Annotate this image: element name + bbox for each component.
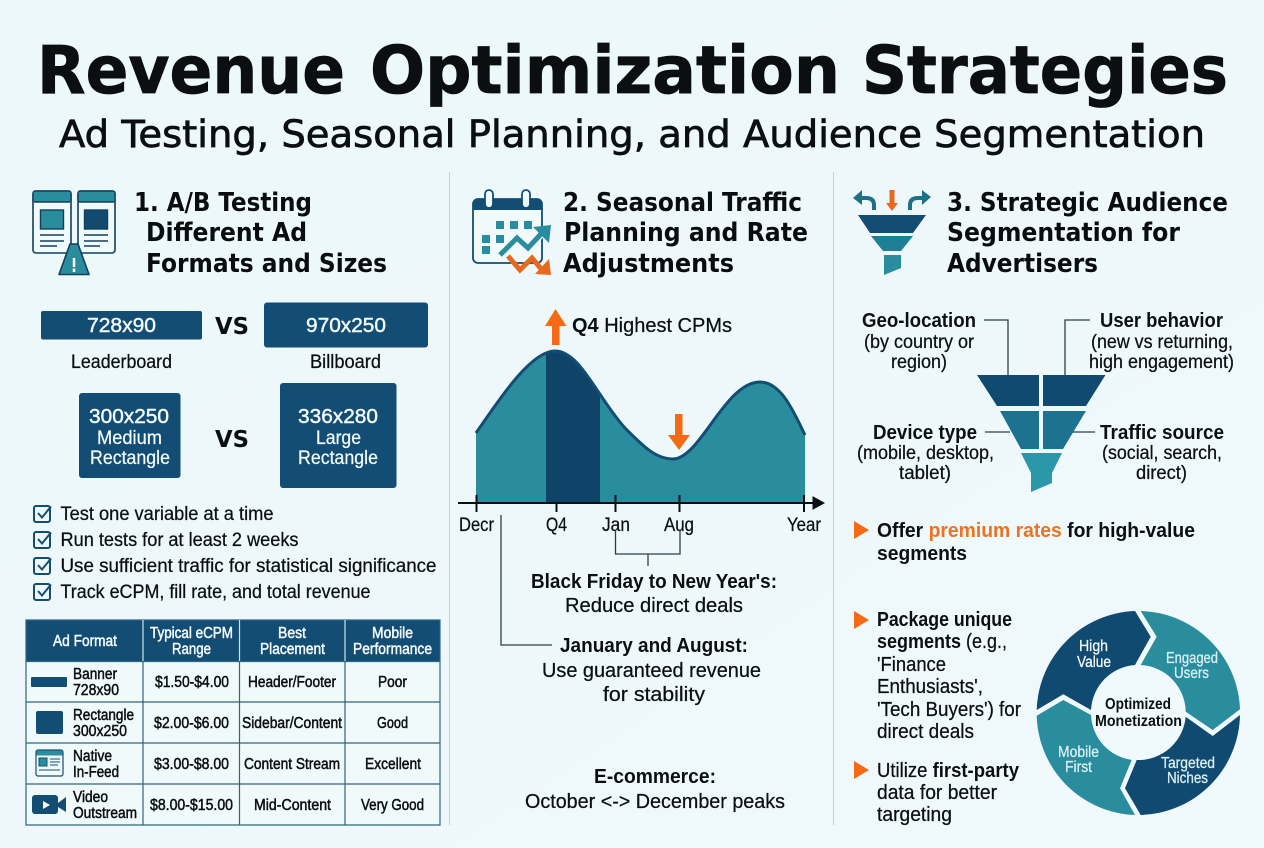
table: ad format comparison: Native <box>73 748 112 765</box>
label: device type: (mobile, desktop, <box>857 443 994 464</box>
icon: banner <box>31 677 67 687</box>
callout: January and August <box>542 635 761 706</box>
bullet: package unique segments: 'Finance <box>877 654 946 676</box>
label: user behavior: User behavior <box>1100 310 1223 332</box>
icon: native feed <box>36 750 63 776</box>
segment: engaged users <box>1141 611 1240 730</box>
panel: seasonal planning <box>458 188 824 813</box>
callout: January and August: Use guaranteed revenue <box>542 660 761 682</box>
checklist: Track eCPM, fill rate, and total revenue <box>60 582 370 603</box>
label: traffic source: (social, search, <box>1102 443 1222 464</box>
ad size: 300x250 medium rectangle: Rectangle <box>90 448 170 469</box>
arrow: Q4 up <box>545 309 566 345</box>
callout: Black Friday: Black Friday to New Year's: <box>531 571 777 593</box>
callout: E-commerce <box>525 766 785 813</box>
vs label: VS <box>215 427 249 453</box>
center label <box>1095 696 1182 730</box>
table: ad format comparison: In-Feed <box>73 764 119 781</box>
heading: section 1: Different Ad <box>146 218 307 248</box>
label: user behavior <box>1089 310 1234 373</box>
segment: engaged users: Users <box>1174 665 1209 682</box>
icon: A/B test windows <box>33 191 115 274</box>
label: geo-location: (by country or <box>864 332 975 353</box>
label: geo-location: Geo-location <box>862 310 976 332</box>
callout: January and August: for stability <box>603 684 705 706</box>
heading: section 2 <box>563 188 808 279</box>
table: ad format comparison <box>26 620 440 825</box>
ad size: 336x280 large rectangle: Rectangle <box>298 448 378 469</box>
heading: section 1 <box>134 188 387 279</box>
table: ad format comparison: Banner <box>73 666 117 683</box>
heading: section 1: Formats and Sizes <box>146 249 387 279</box>
table: ad format comparison: $2.00-$6.00 <box>154 715 229 732</box>
table: ad format comparison: Outstream <box>73 805 137 822</box>
heading: section 2: Planning and Rate <box>564 218 808 248</box>
table: ad format comparison: Mid-Content <box>254 797 332 814</box>
icon: rectangle <box>36 711 63 734</box>
heading: section 3 <box>947 188 1228 279</box>
heading: section 3: Advertisers <box>947 249 1098 279</box>
table: ad format comparison: Rectangle <box>73 707 134 724</box>
ad size: 728x90 leaderboard <box>41 311 202 373</box>
ad size: 336x280 large rectangle: Large <box>316 428 361 449</box>
funnel diagram <box>977 320 1106 492</box>
label: traffic source: direct) <box>1136 463 1187 484</box>
table: ad format comparison: Video <box>73 789 108 806</box>
subtitle: Ad Testing, Seasonal Planning, and Audience Segmentation <box>59 113 1205 156</box>
segment: targeted niches: Targeted <box>1161 755 1215 772</box>
segment: targeted niches <box>1125 715 1240 815</box>
table: ad format comparison: $1.50-$4.00 <box>155 674 229 691</box>
table: ad format comparison: Sidebar/Content <box>242 715 343 732</box>
title: Strategies <box>862 32 1228 109</box>
heading: section 2: Adjustments <box>563 249 734 279</box>
table: ad format comparison: Typical eCPM <box>150 625 233 642</box>
ad size: 300x250 medium rectangle <box>79 393 180 478</box>
bullet: premium rates: Offer premium rates for high-value <box>877 520 1195 542</box>
bullet: package unique segments: direct deals <box>877 721 974 743</box>
table: ad format comparison: 300x250 <box>73 723 127 740</box>
bullet: package unique segments: segments (e.g., <box>877 631 1007 653</box>
heading: section 2: 2. Seasonal Traffic <box>563 188 802 218</box>
ad size: 728x90 leaderboard: 728x90 <box>87 315 156 337</box>
segment: mobile first <box>1037 700 1135 815</box>
bullet: premium rates: segments <box>877 543 967 565</box>
ad size: 728x90 leaderboard: Leaderboard <box>71 352 172 373</box>
checklist: Test one variable at a time <box>60 504 274 525</box>
chart: seasonal traffic curve: Year <box>787 515 822 536</box>
chart: seasonal traffic curve: Jan <box>602 515 630 536</box>
table: ad format comparison: Content Stream <box>244 756 340 773</box>
title <box>37 32 1228 109</box>
checklist: Use sufficient traffic for statistical significance <box>60 556 436 577</box>
segment: high value <box>1037 611 1151 710</box>
callout: Black Friday: Reduce direct deals <box>565 595 743 617</box>
ad size: 300x250 medium rectangle: Medium <box>97 428 162 449</box>
table: ad format comparison: Placement <box>260 641 326 658</box>
ad size: 336x280 large rectangle: 336x280 <box>298 406 378 428</box>
center label: Monetization <box>1095 713 1182 730</box>
bullet: first-party data: Utilize first-party <box>877 760 1020 782</box>
center label: Optimized <box>1105 696 1171 713</box>
icon: video <box>32 795 66 814</box>
heading: section 3: 3. Strategic Audience <box>947 188 1228 218</box>
callout: E-commerce: E-commerce: <box>594 766 716 788</box>
heading: section 1: 1. A/B Testing <box>134 188 312 218</box>
chart: optimized monetization cycle <box>1037 611 1240 815</box>
table: ad format comparison: Poor <box>378 674 407 691</box>
segment: targeted niches: Niches <box>1167 770 1208 787</box>
callout: E-commerce: October <-> December peaks <box>525 791 785 813</box>
segment: mobile first: Mobile <box>1058 744 1099 761</box>
heading: section 3: Segmentation for <box>947 218 1180 248</box>
table: ad format comparison: Range <box>172 641 211 658</box>
table: ad format comparison: Ad Format <box>53 633 118 650</box>
table: ad format comparison: $3.00-$8.00 <box>154 756 229 773</box>
ad size: 336x280 large rectangle <box>280 383 396 488</box>
panel: audience segmentation <box>853 188 1240 826</box>
checklist: Run tests for at least 2 weeks <box>60 530 298 551</box>
table: ad format comparison: Excellent <box>365 756 422 773</box>
bullet: first-party data <box>854 760 1020 826</box>
ad size: 300x250 medium rectangle: 300x250 <box>89 406 169 428</box>
table: ad format comparison: Best <box>278 625 307 642</box>
bracket connectors <box>501 515 680 645</box>
segment: high value: High <box>1079 638 1108 655</box>
callout: January and August: January and August: <box>560 635 748 657</box>
label: user behavior: (new vs returning, <box>1091 332 1233 353</box>
table: ad format comparison: 728x90 <box>73 682 119 699</box>
bullet: premium rates <box>854 520 1195 565</box>
label: traffic source: Traffic source <box>1100 422 1224 444</box>
bullet: package unique segments <box>854 609 1021 743</box>
title: Revenue <box>37 32 345 109</box>
table: ad format comparison: Good <box>377 715 408 732</box>
callout: Black Friday <box>531 571 777 617</box>
chart: seasonal traffic curve: Aug <box>664 515 694 536</box>
label: geo-location: region) <box>891 352 947 373</box>
axis <box>458 495 824 512</box>
arrow: low season down <box>668 414 690 450</box>
table: ad format comparison: Very Good <box>361 797 424 814</box>
ad size: 970x250 billboard: 970x250 <box>306 315 386 337</box>
table: ad format comparison: Mobile <box>372 625 413 642</box>
bullet: first-party data: targeting <box>877 804 952 826</box>
label: device type: Device type <box>873 422 977 444</box>
label: device type: tablet) <box>899 463 951 484</box>
label: Q4 highest CPMs: Q4 Highest CPMs <box>572 314 732 337</box>
table: ad format comparison: Header/Footer <box>248 674 336 691</box>
icon: funnel with arrows <box>853 190 931 275</box>
bullet: package unique segments: Package unique <box>877 609 1012 631</box>
segment: high value: Value <box>1077 654 1111 671</box>
chart: seasonal traffic curve: Q4 <box>546 515 567 536</box>
segment: engaged users: Engaged <box>1166 650 1218 667</box>
panel: A/B testing <box>26 188 440 825</box>
ad size: 970x250 billboard <box>264 302 428 373</box>
ad size: 970x250 billboard: Billboard <box>310 352 381 373</box>
label: user behavior: high engagement) <box>1089 352 1234 373</box>
label: traffic source <box>1100 422 1224 484</box>
table: ad format comparison: Performance <box>353 641 432 658</box>
chart: seasonal traffic curve <box>458 340 824 536</box>
bullet: package unique segments: 'Tech Buyers') for <box>877 699 1021 721</box>
title: Optimization <box>370 32 840 109</box>
checklist <box>34 504 436 603</box>
bullet: first-party data: data for better <box>877 782 997 804</box>
label: geo-location <box>862 310 976 373</box>
segment: mobile first: First <box>1065 759 1092 776</box>
chart: seasonal traffic curve: Decr <box>459 515 495 536</box>
icon: calendar with trends <box>473 190 551 275</box>
table: ad format comparison: $8.00-$15.00 <box>150 797 233 814</box>
label: device type <box>857 422 994 484</box>
bullet: package unique segments: Enthusiasts', <box>877 676 983 698</box>
vs label: VS <box>215 314 249 340</box>
